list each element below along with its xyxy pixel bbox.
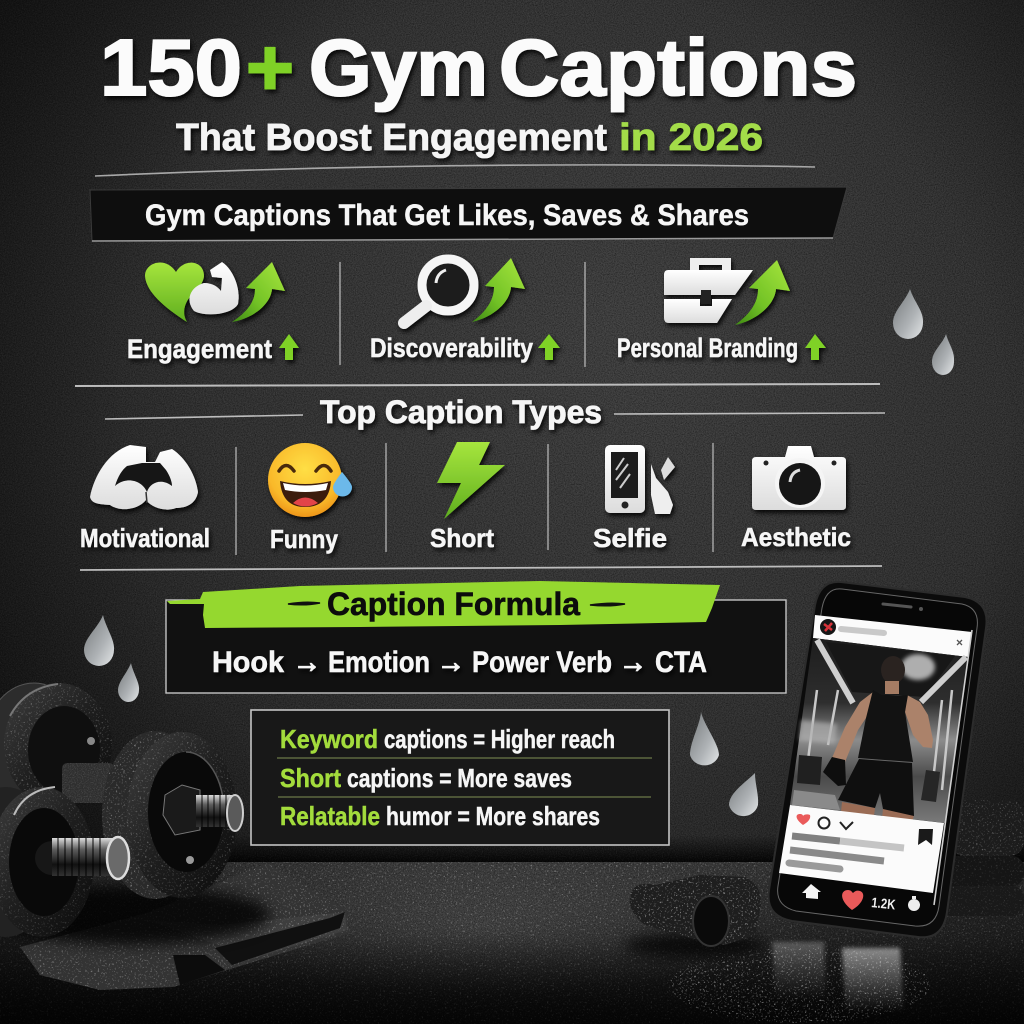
label: engagement: Engagement bbox=[127, 334, 272, 364]
gym floor bbox=[0, 835, 1024, 1024]
formula text: → bbox=[437, 646, 465, 679]
tip: short bbox=[280, 763, 572, 793]
benefits row bbox=[127, 258, 826, 364]
label: motivational: Motivational bbox=[80, 523, 210, 553]
gym photo with athlete bbox=[790, 638, 968, 823]
tip: short: captions = More saves bbox=[347, 763, 572, 793]
post header bbox=[813, 615, 972, 657]
icon: heart and bicep with arrow bbox=[145, 262, 285, 322]
tip: relatable: humor = More shares bbox=[386, 801, 600, 831]
section lines and column dividers bbox=[75, 262, 885, 570]
panel: caption formula bbox=[166, 581, 786, 693]
formula text: → bbox=[293, 646, 321, 679]
phone body bbox=[768, 582, 987, 937]
tip: keyword bbox=[280, 724, 615, 754]
title line 1: 150 bbox=[100, 23, 242, 112]
dumbbell shadow bbox=[0, 885, 270, 945]
phone screen edge bbox=[778, 589, 977, 926]
green brush header bbox=[167, 581, 720, 628]
title line 1 bbox=[100, 23, 857, 112]
icon: laughing emoji bbox=[268, 443, 352, 517]
label: funny: Funny bbox=[270, 524, 338, 554]
rolled towel bbox=[625, 875, 765, 957]
post footer bbox=[779, 805, 944, 893]
speaker and camera bbox=[883, 604, 923, 611]
right dumbbell bbox=[102, 731, 243, 899]
tip: short: Short bbox=[280, 763, 341, 793]
label: aesthetic: Aesthetic bbox=[741, 522, 851, 552]
formula text: Hook bbox=[212, 646, 284, 679]
formula text: → bbox=[619, 646, 647, 679]
nav bar bbox=[802, 884, 920, 912]
heading: top caption types: Top Caption Types bbox=[320, 394, 602, 430]
towel under dumbbells bbox=[20, 863, 349, 990]
formula text: Emotion bbox=[328, 646, 430, 679]
subtitle banner bbox=[90, 165, 847, 241]
water droplets bbox=[84, 289, 954, 816]
label: personal branding: Personal Branding bbox=[617, 333, 798, 363]
tip: keyword: Keyword bbox=[280, 724, 378, 754]
panel: caption tips bbox=[251, 710, 669, 845]
header text: Caption Formula bbox=[327, 586, 580, 622]
icon: magnifier with arrow bbox=[404, 258, 525, 323]
title line 1: + bbox=[246, 23, 294, 112]
label: selfie: Selfie bbox=[593, 523, 667, 553]
formula text: Power Verb bbox=[472, 646, 612, 679]
athlete glove bbox=[823, 757, 846, 786]
athlete tank top bbox=[858, 690, 913, 762]
tip: relatable bbox=[280, 801, 600, 831]
label: short: Short bbox=[430, 523, 494, 553]
nav bar: 1.2K bbox=[871, 894, 896, 912]
tip: relatable: Relatable bbox=[280, 801, 380, 831]
front dumbbell bbox=[0, 787, 129, 937]
phone mockup bbox=[768, 582, 987, 937]
caption types row bbox=[80, 442, 851, 554]
banner text: Gym Captions That Get Likes, Saves & Shares bbox=[145, 199, 749, 232]
formula text bbox=[212, 646, 707, 679]
athlete head bbox=[881, 656, 905, 684]
phone side highlight bbox=[934, 630, 972, 905]
icon: selfie phone and hand bbox=[605, 445, 675, 514]
athlete arms and shoulders bbox=[832, 692, 873, 762]
formula text: CTA bbox=[655, 646, 707, 679]
title line 2: That Boost Engagement bbox=[176, 117, 607, 159]
icon: camera bbox=[752, 446, 846, 510]
label: discoverability: Discoverability bbox=[370, 333, 533, 363]
rear dumbbell bbox=[0, 683, 114, 807]
athlete shorts bbox=[838, 759, 914, 816]
athlete bbox=[823, 656, 933, 823]
title bbox=[100, 23, 857, 159]
icon: flexed arms bbox=[90, 445, 198, 510]
dumbbells bbox=[0, 683, 270, 945]
icon: briefcase with arrow bbox=[664, 258, 790, 325]
tip: keyword: captions = Higher reach bbox=[384, 724, 615, 754]
title line 1: Gym bbox=[309, 23, 488, 112]
title line 2: in 2026 bbox=[619, 117, 763, 159]
title line 1: Captions bbox=[499, 23, 857, 112]
icon: lightning bolt bbox=[437, 442, 505, 519]
stacked weights behind phone bbox=[940, 800, 1024, 916]
athlete legs bbox=[841, 802, 914, 823]
floor reflections bbox=[670, 942, 930, 1023]
header dashes bbox=[288, 602, 625, 606]
